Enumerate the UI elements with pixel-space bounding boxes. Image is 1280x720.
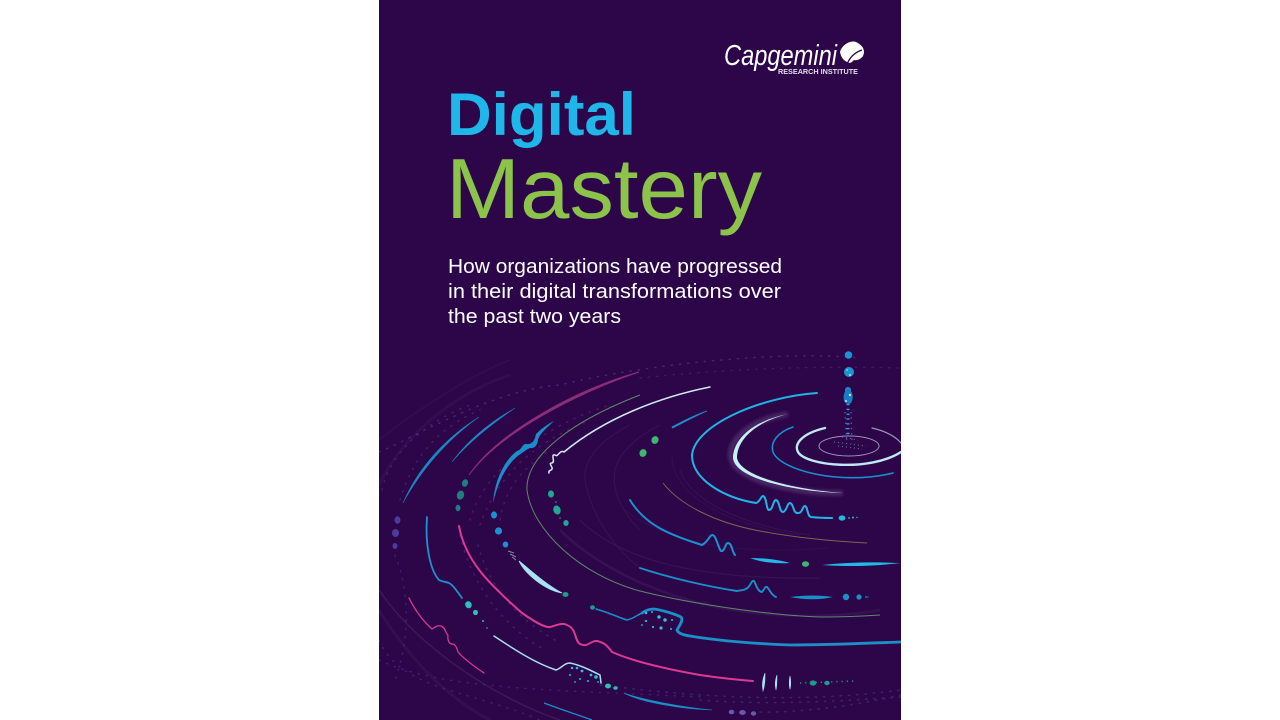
- pale halo ring: [731, 414, 843, 493]
- magenta main wave: [459, 526, 753, 681]
- blue ring with hump and cyan lens: [630, 500, 901, 567]
- green dots: [639, 436, 659, 457]
- cyan dot tail: [839, 515, 858, 521]
- title: Digital: [447, 81, 636, 148]
- upper white arc with squiggle: [549, 387, 710, 473]
- particle fill under big wave: [641, 611, 673, 630]
- teal dots under white arc: [548, 490, 569, 526]
- teal and purple left dots: [392, 478, 508, 549]
- blue left wave: [427, 517, 488, 629]
- blue bottom arc: [544, 703, 592, 720]
- title: Mastery: [446, 142, 763, 237]
- pale lower wave: [494, 636, 618, 690]
- logo: Capgemini Research Institute: RESEARCH INSTITUTE: [778, 67, 858, 76]
- pale lens and teal dots: [508, 551, 595, 610]
- subtitle: How organizations have progressed: [448, 255, 782, 278]
- cyan wave ring: [692, 393, 832, 518]
- blue bottom-left arc: [624, 693, 712, 710]
- subtitle: [448, 255, 782, 328]
- blue arc thin left: [403, 408, 515, 503]
- logo: Capgemini Research Institute: Capgemini: [724, 40, 838, 72]
- blue ring with double hump: [640, 568, 869, 600]
- rings around droplet: [772, 427, 901, 478]
- magenta arc top: [469, 372, 639, 475]
- faint background ripple arcs: [379, 425, 880, 720]
- dotted particle arcs: [379, 356, 901, 720]
- subtitle: the past two years: [448, 305, 621, 328]
- blue blade with squiggle: [493, 421, 554, 503]
- ripple illustration: [379, 351, 901, 720]
- magenta left wave: [409, 598, 484, 673]
- droplet column: [834, 351, 866, 449]
- blue big wave: [596, 609, 900, 645]
- thin yellow ring: [663, 483, 867, 543]
- purple bottom dots: [729, 710, 756, 716]
- blue arc fragment: [672, 411, 707, 428]
- thin green ring: [527, 395, 880, 617]
- cover panel background: [379, 0, 901, 720]
- pale ticks and teal row: [762, 673, 855, 691]
- title: [446, 81, 763, 237]
- subtitle: in their digital transformations over: [448, 280, 781, 303]
